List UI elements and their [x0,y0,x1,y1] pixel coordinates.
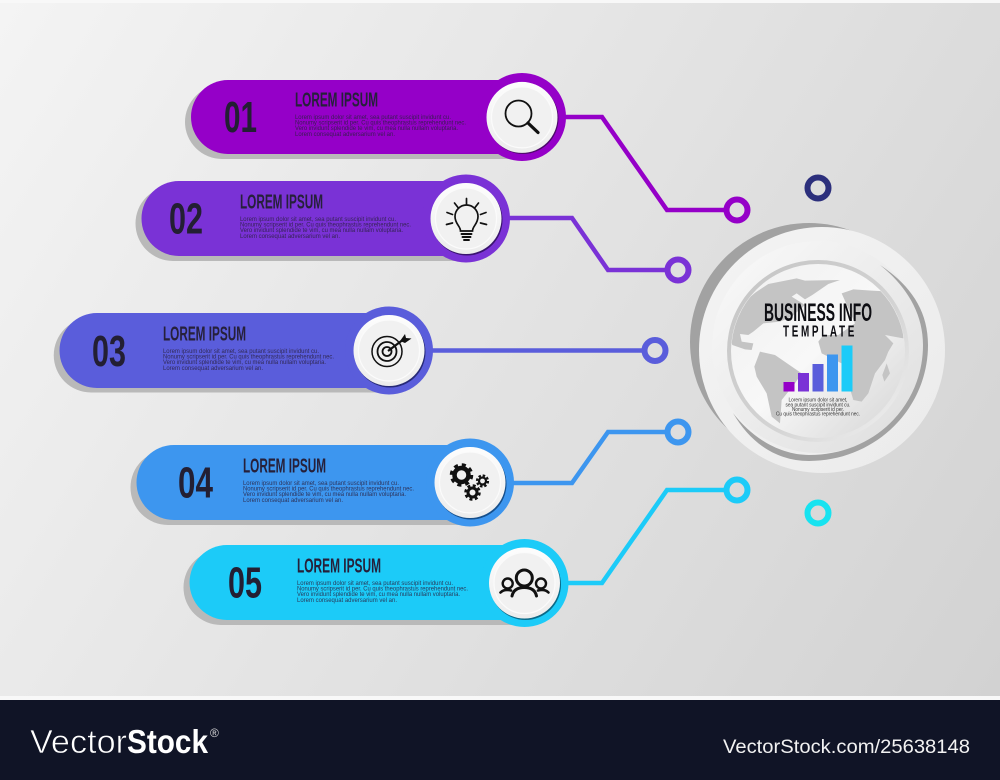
panel: step 01: LOREM IPSUM [295,90,378,112]
panel: step 04: Nonumy scripserit id per. Cu quis theophrastus reprehendunt nec. [243,487,414,493]
panel: step 02: Vero invidunt splendide te vim, cu mea nulla nullam voluptaria. [240,228,403,234]
world map [728,278,903,423]
panel: step 04: Lorem consequat adversarium vel an. [243,498,343,504]
panel: step 02: LOREM IPSUM [240,192,323,214]
panel: step 05: LOREM IPSUM [297,556,381,578]
caption: sea putant suscipit invidunt cu. [786,402,851,408]
panel: step 02 [136,174,510,262]
image id: VectorStock.com/25638148 [723,736,970,758]
panel: step 02: Nonumy scripserit id per. Cu quis theophrastus reprehendunt nec. [240,223,411,229]
logo [30,724,208,761]
panel: step 04: Lorem ipsum dolor sit amet, sea putant suscipit invidunt cu. [243,481,399,487]
panel: step 04: Vero invidunt splendide te vim, cu mea nulla nullam voluptaria. [243,492,406,498]
panel: step 05: 05 [228,558,262,608]
caption: Nonumy scripserit id per. [792,407,844,413]
grey crescent [733,265,928,461]
bar chart [784,346,852,392]
panel: central business info badge [690,223,945,473]
caption: Cu quis theophrastus reprehendunt nec. [776,412,860,418]
globe rim [727,260,909,442]
panel: step 05 [184,539,568,627]
icon: gears [452,465,488,500]
icon: target with arrow [372,334,412,366]
panel: step 02: Lorem consequat adversarium vel an. [240,234,340,240]
panel: step 01: 01 [224,93,257,142]
decorative ring: cyan [808,502,828,524]
panel: step 03: Lorem consequat adversarium vel an. [163,366,263,372]
panel: step 03: LOREM IPSUM [163,324,246,346]
subtitle: TEMPLATE [783,322,857,340]
panel: step 03: 03 [92,327,126,376]
panel: step 03: Lorem ipsum dolor sit amet, sea putant suscipit invidunt cu. [163,349,319,355]
footer bar [0,700,1000,780]
title: BUSINESS INFO [764,299,872,327]
panel: step 03 [54,306,433,394]
panel: step 02: 02 [169,194,203,244]
panel: step 01: Nonumy scripserit id per. Cu quis theophrastus reprehendunt nec. [295,121,466,127]
icon: light bulb [446,198,486,240]
light disc [699,227,945,473]
grey outer ring [690,223,928,461]
panel: step 04: 04 [178,458,213,508]
connector lines [428,117,726,583]
connector end rings [644,200,748,500]
panel: step 01: Lorem consequat adversarium vel an. [295,132,395,138]
panel: step 01: Lorem ipsum dolor sit amet, sea putant suscipit invidunt cu. [295,115,451,121]
panel: step 02: Lorem ipsum dolor sit amet, sea putant suscipit invidunt cu. [240,217,396,223]
caption: Lorem ipsum dolor sit amet, [788,398,848,404]
panel: step 05: Lorem consequat adversarium vel an. [297,598,397,604]
panel: step 04: LOREM IPSUM [243,456,326,478]
panel: step 03: Vero invidunt splendide te vim, cu mea nulla nullam voluptaria. [163,360,326,366]
globe [731,264,905,438]
caption [776,398,860,418]
panel: step 04 [130,438,514,526]
logo: Vector [30,724,127,761]
panel: step 05: Lorem ipsum dolor sit amet, sea putant suscipit invidunt cu. [297,581,453,587]
panel: step 05: Nonumy scripserit id per. Cu quis theophrastus reprehendunt nec. [297,587,468,593]
panel: step 03: Nonumy scripserit id per. Cu quis theophrastus reprehendunt nec. [163,355,334,361]
icon: people [500,570,548,596]
panel: step 05: Vero invidunt splendide te vim, cu mea nulla nullam voluptaria. [297,592,460,598]
icon: magnifying glass [506,100,538,132]
registered mark: ® [210,726,219,740]
logo: Stock [127,724,208,761]
decorative ring: navy [808,178,828,198]
panel: step 01 [185,73,566,161]
panel: step 01: Vero invidunt splendide te vim, cu mea nulla nullam voluptaria. [295,126,458,132]
